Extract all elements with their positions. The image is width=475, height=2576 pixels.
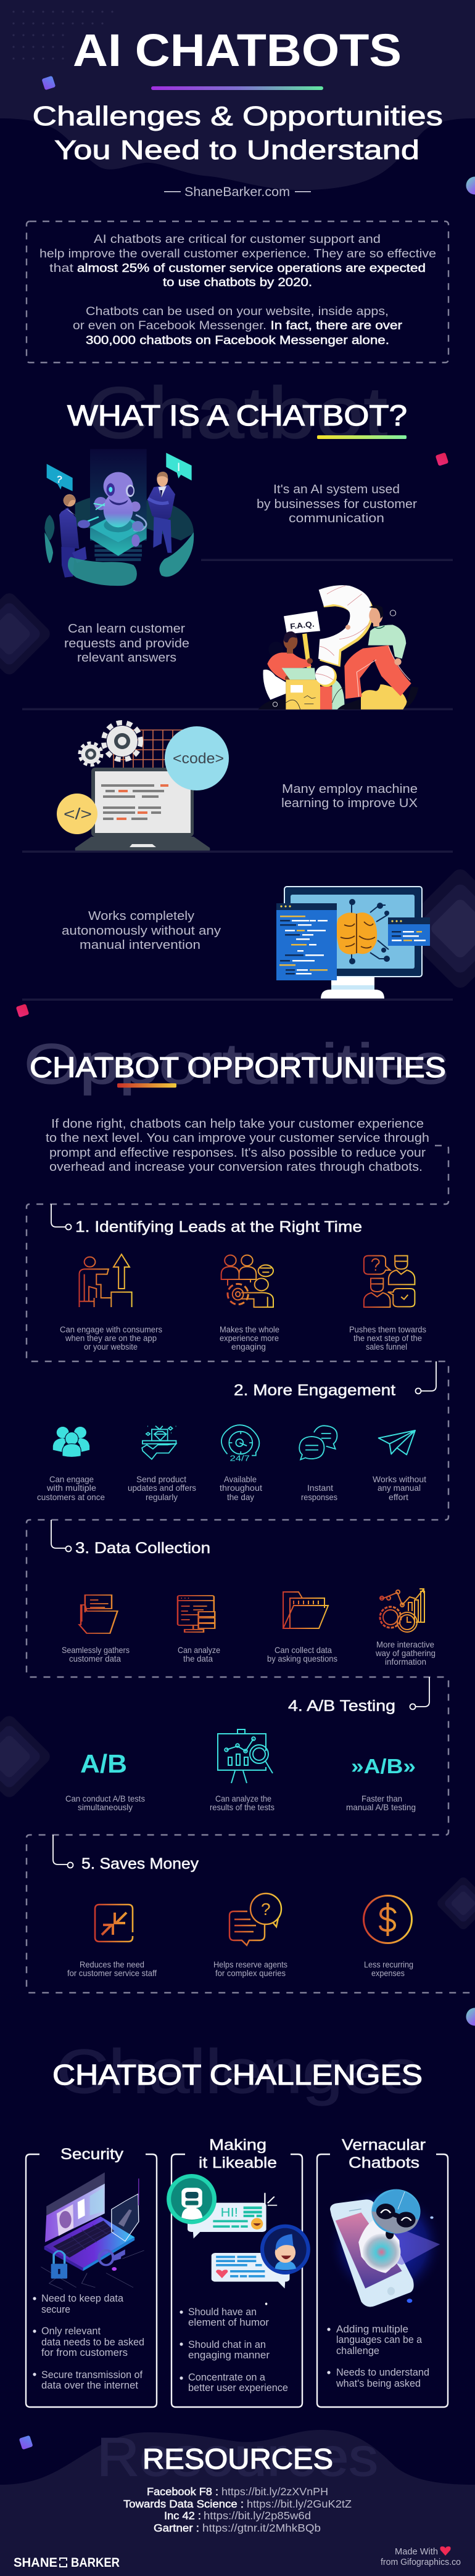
illustration: FAQ people with question mark: F.A.Q. [290, 620, 315, 631]
text: what it is: communication [289, 512, 384, 525]
subtitle [32, 101, 443, 165]
section 2: more engagement: updates and offers [128, 1483, 196, 1493]
ghost word: Resources: Resources [97, 2426, 378, 2487]
panel: security: for from customers [41, 2347, 128, 2358]
heading: chatbot challenges: CHATBOT CHALLENGES [52, 2059, 423, 2091]
panel: making it likeable: it Likeable [199, 2154, 277, 2172]
text: learning: requests and provide [64, 637, 189, 650]
resource links [123, 2485, 352, 2534]
opportunities intro text: prompt and effective responses. It's also possible to reduce your [49, 1146, 426, 1160]
section 3: data collection: More interactive [376, 1639, 434, 1649]
section 4: A/B testing: Faster than [361, 1794, 402, 1803]
panel: security: Security [60, 2146, 124, 2163]
illustration: chatbot and customer conversation [167, 2174, 310, 2305]
section 4: A/B testing: Can analyze the [215, 1794, 271, 1803]
section 2: more engagement: Available [224, 1474, 257, 1484]
illustration: secure laptop [41, 2172, 144, 2289]
illustration: monitor with brain and code windows [276, 887, 430, 999]
subtitle: Challenges & Opportunities [32, 101, 443, 131]
section 4: A/B testing: manual A/B testing [346, 1802, 416, 1812]
section 3: data collection: the data [183, 1654, 213, 1663]
text: what it is: It's an AI system used [273, 483, 400, 496]
panel: making it likeable: better user experience [188, 2382, 288, 2393]
panel: vernacular chatbots: Chatbots [349, 2154, 419, 2172]
section 3: data collection [51, 1520, 436, 1667]
icon: paper plane [379, 1430, 415, 1454]
illustration: FAQ people with question mark [258, 585, 418, 710]
section 3: data collection: customer data [69, 1654, 121, 1663]
title: AI CHATBOTS [73, 25, 402, 76]
section 2: more engagement: with multiple [46, 1483, 96, 1493]
heading: chatbot opportunities: CHATBOT OPPORTUNITIES [30, 1051, 446, 1083]
section 1: identifying leads: sales funnel [366, 1342, 407, 1352]
intro panel: to use chatbots by 2020. [163, 276, 312, 289]
intro panel: AI chatbots are critical for customer support and [94, 233, 381, 246]
illustration: laptop with code and gears: </> [64, 805, 92, 823]
text: what it is [257, 483, 417, 525]
opportunities intro text [46, 1117, 429, 1174]
icon: presentation board with magnifier [218, 1729, 273, 1783]
text: learning: Can learn customer [68, 622, 185, 636]
logo: Shane Barker: BARKER [71, 2556, 120, 2570]
intro panel: help improve the overall customer experience. They are so effective [39, 248, 436, 260]
section 3: data collection: Can analyze [178, 1645, 220, 1655]
illustration: laptop with code and gears: <code> [173, 750, 224, 767]
section 2: more engagement: 2. More Engagement [234, 1382, 395, 1399]
panel: making it likeable [167, 2136, 310, 2407]
section 2: more engagement: Works without [373, 1474, 426, 1484]
divider [201, 559, 453, 561]
resource links: Towards Data Science : [123, 2498, 244, 2510]
icon: group of people [53, 1427, 89, 1457]
intro panel [27, 221, 448, 363]
section 2: more engagement: Can engage [49, 1474, 94, 1484]
icon: gift on hand [142, 1426, 176, 1459]
heading: resources: RESOURCES [142, 2443, 333, 2475]
section 1: identifying leads: Pushes them towards [349, 1325, 426, 1334]
section 2: more engagement: any manual [378, 1483, 421, 1493]
icon: compress arrows [95, 1905, 133, 1942]
credit [381, 2546, 461, 2567]
icon: sales funnel conversation [364, 1256, 415, 1307]
panel: vernacular chatbots: Needs to understand [336, 2367, 429, 2378]
icon: 24/7 clock: 24/7 [229, 1453, 250, 1462]
section 1: identifying leads: experience more [220, 1334, 279, 1343]
panel: making it likeable: element of humor [188, 2317, 270, 2328]
text: autonomy: Works completely [88, 909, 194, 923]
illustration: phone with chatbot [328, 2187, 444, 2307]
text: machine learning [281, 782, 418, 810]
text: learning: relevant answers [77, 651, 176, 665]
section 1: identifying leads: 1. Identifying Leads at the Right Time [75, 1218, 362, 1236]
section 5: saves money: Less recurring [364, 1959, 413, 1969]
resource links: https://bit.ly/2p85w6d [204, 2509, 311, 2522]
section 5: saves money: Reduces the need [80, 1959, 144, 1969]
panel: security: data needs to be asked [41, 2337, 144, 2348]
heading accent bar [117, 1083, 176, 1088]
panel: security: secure [41, 2304, 70, 2315]
heading: what is a chatbot: WHAT IS A CHATBOT? [67, 399, 407, 432]
illustration: chatbot and customer conversation: HI! [221, 2205, 238, 2220]
icon: 24/7 clock [221, 1425, 259, 1462]
opportunities intro text: overhead and increase your conversion rates through chatbots. [49, 1160, 423, 1174]
section 4: A/B testing: Can conduct A/B tests [65, 1794, 145, 1803]
illustration: laptop with code and gears [57, 723, 229, 853]
section 5: saves money: for complex queries [215, 1968, 286, 1978]
divider [22, 999, 453, 1001]
icon: person climbing to arrow [79, 1254, 132, 1307]
section 2: more engagement: Instant [307, 1483, 333, 1493]
panel: vernacular chatbots: Adding multiple [336, 2324, 408, 2335]
section 4: A/B testing: 4. A/B Testing [288, 1697, 395, 1715]
panel: vernacular chatbots: what's being asked [336, 2378, 421, 2389]
resource links: Inc 42 : [164, 2509, 201, 2522]
icon: code on monitor [178, 1596, 215, 1632]
section 2: more engagement [37, 1361, 436, 1502]
title accent bar [151, 86, 323, 90]
divider [22, 851, 453, 853]
text: autonomy [62, 909, 221, 952]
illustration: robot with businessmen [44, 449, 194, 586]
section 2: more engagement: responses [301, 1492, 337, 1502]
section 1: identifying leads: when they are on the app [65, 1334, 157, 1343]
intro panel: Chatbots can be used on your website, inside apps, [86, 305, 389, 318]
resource links: Facebook F8 : [147, 2485, 218, 2498]
intro panel: almost 25% of customer service operations are expected [77, 262, 426, 275]
panel: vernacular chatbots: challenge [336, 2345, 379, 2357]
panel: security: Need to keep data [41, 2293, 124, 2304]
dashed serpentine path [27, 1146, 475, 1993]
panel: security: data over the internet [41, 2380, 138, 2391]
logo: Shane Barker [14, 2556, 120, 2570]
credit: from Gifographics.co [381, 2558, 461, 2567]
panel: making it likeable: Should chat in an [188, 2339, 266, 2350]
icon: dollar coin [364, 1895, 412, 1943]
section 5: saves money: 5. Saves Money [81, 1855, 199, 1873]
opportunities intro text: If done right, chatbots can help take your customer experience [51, 1117, 424, 1131]
text: machine learning: Many employ machine [282, 782, 418, 796]
section 5: saves money: Helps reserve agents [213, 1959, 287, 1969]
icon: open folder [283, 1592, 328, 1629]
ghost word: Chatbot: Chatbot [86, 372, 387, 454]
section 1: identifying leads: the next step of the [353, 1334, 422, 1343]
illustration: robot with businessmen: ? [56, 474, 63, 486]
text: learning [64, 622, 189, 665]
byline: ShaneBarker.com [184, 185, 290, 199]
subtitle: You Need to Understand [54, 135, 419, 165]
section 2: more engagement: effort [389, 1492, 408, 1502]
section 5: saves money: for customer service staff [67, 1968, 157, 1978]
section 5: saves money: expenses [371, 1968, 405, 1978]
section 2: more engagement: the day [227, 1492, 254, 1502]
opportunities intro text: to the next level. You can improve your customer service through [46, 1131, 429, 1145]
icon: A/B: A/B [80, 1749, 127, 1778]
resource links: https://bit.ly/2GuK2tZ [247, 2498, 352, 2510]
panel: making it likeable: Should have an [188, 2307, 257, 2318]
panel: security: Secure transmission of [41, 2369, 142, 2381]
text: autonomy: manual intervention [80, 938, 200, 952]
credit: Made With [395, 2547, 438, 2557]
panel: vernacular chatbots [317, 2136, 448, 2407]
panel: making it likeable: engaging manner [188, 2350, 270, 2361]
icon: chat with question [229, 1893, 281, 1945]
section 3: data collection: way of gathering [375, 1648, 436, 1658]
section 2: more engagement: customers at once [37, 1492, 105, 1502]
resource links: https://gtnr.it/2MhkBQb [202, 2522, 321, 2534]
section 3: data collection: information [385, 1657, 426, 1667]
section 4: A/B testing: results of the tests [210, 1802, 275, 1812]
resource links: https://bit.ly/2zXVnPH [221, 2485, 328, 2498]
intro panel: or even on Facebook Messenger. [73, 319, 266, 332]
section 3: data collection: 3. Data Collection [75, 1540, 210, 1557]
icon: folder with documents [79, 1595, 117, 1633]
section 1: identifying leads: Makes the whole [220, 1325, 279, 1334]
intro panel: In fact, there are over [270, 319, 403, 332]
intro panel: that [49, 262, 74, 275]
section 2: more engagement: regularly [146, 1492, 178, 1502]
icon: analytics gears and chart [379, 1589, 424, 1632]
ghost word: Opportunities: Opportunities [24, 1033, 448, 1096]
panel: vernacular chatbots: languages can be a [336, 2334, 423, 2345]
icon: faster A/B: »A/B» [351, 1755, 416, 1778]
icon: chat with question: ? [261, 1900, 271, 1919]
panel: making it likeable: Concentrate on a [188, 2372, 266, 2383]
text: machine learning: learning to improve UX [281, 797, 418, 810]
section 2: more engagement: Send product [136, 1474, 186, 1484]
icon: chat bubbles [299, 1425, 337, 1459]
section 5: saves money [53, 1835, 413, 1978]
panel: security: Only relevant [41, 2326, 101, 2337]
intro panel: 300,000 chatbots on Facebook Messenger alone. [86, 334, 389, 347]
text: what it is: by businesses for customer [257, 498, 417, 511]
panel: security [26, 2146, 157, 2407]
panel: making it likeable: Making [209, 2136, 266, 2154]
section 2: more engagement: throughout [220, 1483, 262, 1493]
section 4: A/B testing: simultaneously [78, 1802, 133, 1812]
section 1: identifying leads [51, 1204, 426, 1352]
section 3: data collection: Can collect data [275, 1645, 332, 1655]
section 1: identifying leads: engaging [231, 1342, 266, 1352]
section 3: data collection: Seamlessly gathers [62, 1645, 130, 1655]
logo: Shane Barker: SHANE [14, 2556, 57, 2570]
panel: vernacular chatbots: Vernacular [342, 2136, 426, 2154]
ghost word: Challenges: Challenges [56, 2037, 419, 2106]
section 1: identifying leads: or your website [84, 1342, 138, 1352]
section 4: A/B testing [65, 1677, 429, 1812]
icon: team engagement [221, 1255, 273, 1307]
heading accent bar [317, 435, 407, 439]
divider [22, 708, 453, 710]
section 1: identifying leads: Can engage with consumers [60, 1325, 162, 1334]
text: autonomy: autonomously without any [62, 924, 221, 938]
section 3: data collection: by asking questions [267, 1654, 337, 1663]
resource links: Gartner : [154, 2522, 199, 2534]
